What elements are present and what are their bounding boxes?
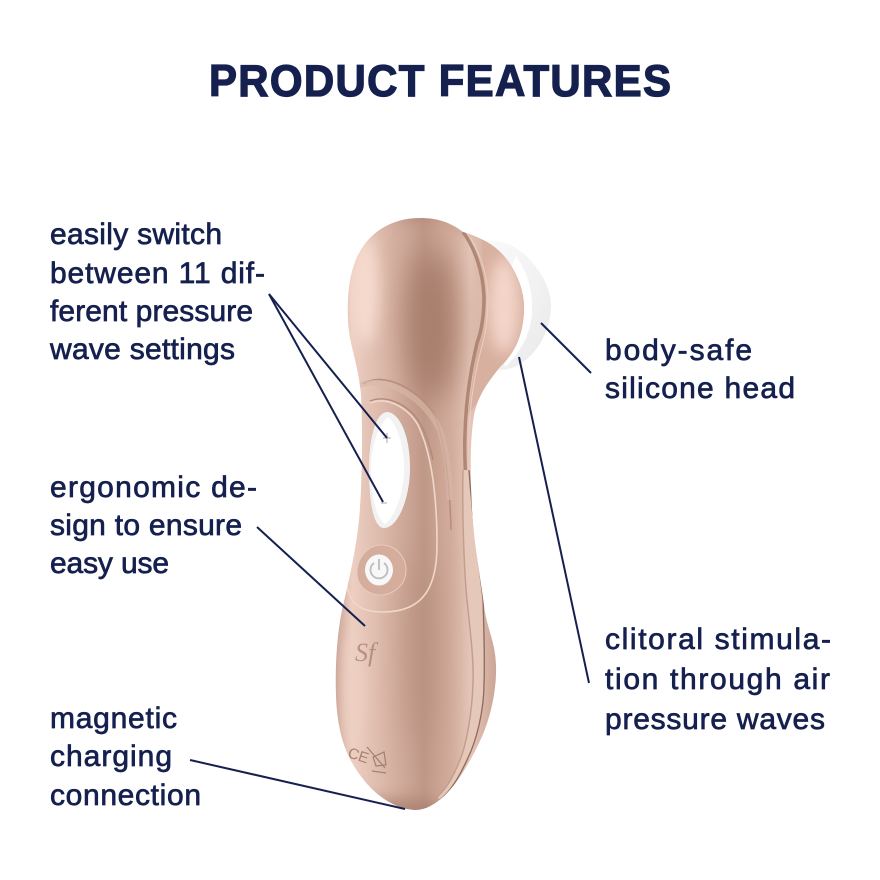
- embossed marks: CE: [346, 745, 371, 767]
- text: magnetic charging: magnetic: [50, 702, 177, 735]
- callout arrows: pressure settings: [269, 294, 387, 502]
- text: clitoral stimulation: clitoral stimula-: [605, 623, 831, 656]
- text: ergonomic design: easy use: [50, 547, 169, 580]
- callout line: ergonomic design: [257, 527, 365, 626]
- device body: [330, 210, 530, 831]
- embossed marks: [346, 745, 386, 773]
- text: magnetic charging: [50, 702, 201, 812]
- product illustration: [330, 210, 551, 831]
- callout line: silicone head: [541, 323, 591, 373]
- text: clitoral stimulation: pressure waves: [605, 703, 825, 736]
- button recess: [363, 380, 451, 530]
- lower band: [437, 470, 484, 800]
- lower body shading: [337, 643, 349, 737]
- neck highlight: [468, 240, 524, 414]
- power button: [357, 545, 406, 595]
- text: silicone head: body-safe: [605, 334, 752, 367]
- title: PRODUCT FEATURES: [209, 57, 671, 106]
- text: pressure settings: easily switch: [50, 218, 222, 251]
- text: silicone head: silicone head: [605, 372, 795, 405]
- text: pressure settings: between 11 dif-: [50, 257, 265, 290]
- text: magnetic charging: charging: [50, 740, 172, 773]
- embossed logo: Sf: [355, 638, 379, 667]
- main seam: [463, 232, 484, 510]
- silicone head: [483, 241, 551, 370]
- pressure paddle: [369, 412, 410, 528]
- upper shading: [351, 235, 379, 345]
- text: clitoral stimulation: [605, 623, 831, 736]
- text: ergonomic design: sign to ensure: [50, 509, 242, 542]
- text: ergonomic design: [50, 471, 257, 580]
- text: magnetic charging: connection: [50, 779, 201, 812]
- callout line: magnetic charging: [190, 760, 405, 809]
- text: pressure settings: wave settings: [49, 333, 235, 366]
- text: clitoral stimulation: tion through air: [605, 663, 830, 696]
- text: ergonomic design: ergonomic de-: [50, 471, 257, 504]
- text: silicone head: [605, 334, 795, 405]
- text: pressure settings: ferent pressure: [50, 295, 253, 328]
- callout line: clitoral stimulation: [519, 357, 589, 683]
- text: pressure settings: [49, 218, 265, 366]
